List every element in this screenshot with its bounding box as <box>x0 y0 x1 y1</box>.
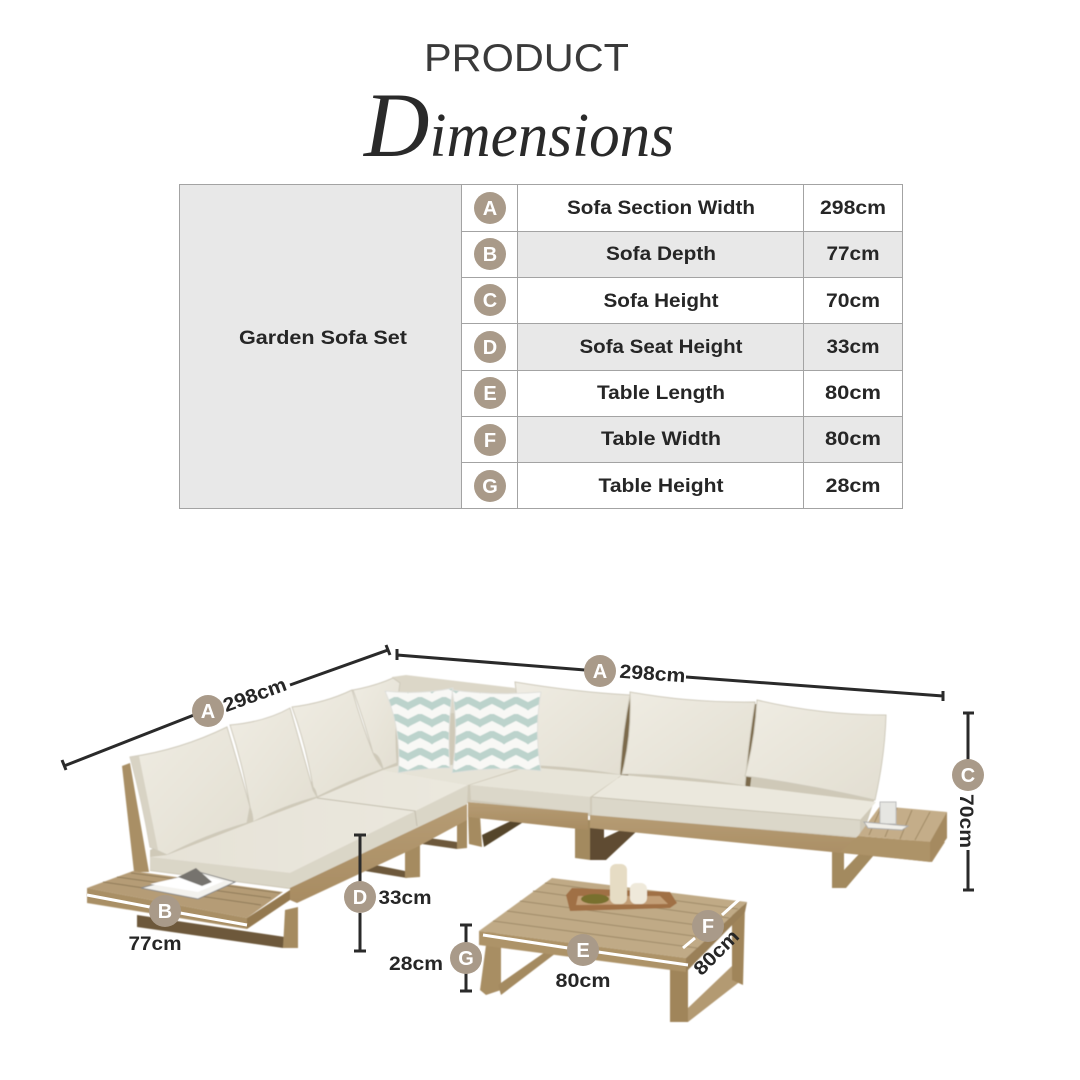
row G: 28cm <box>826 476 880 497</box>
sofa rails <box>290 802 945 903</box>
dimension B <box>87 895 247 955</box>
dimension C <box>952 713 984 890</box>
back cushions right run <box>515 682 886 800</box>
books and glasses <box>141 868 235 899</box>
title: product dimensions <box>362 37 674 176</box>
row G: Table Height <box>598 476 724 497</box>
row B: Sofa Depth <box>606 244 716 265</box>
back cushions left run <box>130 678 400 855</box>
dimension G: 28cm <box>389 953 443 975</box>
row G <box>474 470 880 502</box>
dimension C: 70cm <box>955 794 977 848</box>
row F: Table Width <box>601 429 721 450</box>
dimension A right <box>397 649 943 701</box>
seat cushion corner <box>383 765 530 785</box>
row G: G <box>482 476 498 498</box>
row E: E <box>483 383 497 405</box>
row B: 77cm <box>826 244 880 265</box>
panel: product name cell <box>180 184 462 508</box>
row A: 298cm <box>820 198 886 219</box>
row E: 80cm <box>825 383 881 404</box>
dimension C: C <box>961 765 975 787</box>
dimension E: E <box>576 940 590 962</box>
dimension G <box>389 925 482 991</box>
row A: Sofa Section Width <box>567 198 755 219</box>
row C <box>474 284 880 316</box>
dimension E: 80cm <box>556 970 610 992</box>
row B: B <box>483 244 497 266</box>
dimension D: D <box>353 887 367 909</box>
dimension A left <box>62 645 390 770</box>
panel: product name cell: Garden Sofa Set <box>239 328 408 349</box>
coffee table <box>479 864 747 1022</box>
dimension B: B <box>158 901 172 923</box>
dimensions table <box>180 184 902 508</box>
sofa legs <box>137 807 874 948</box>
row E: Table Length <box>597 383 725 404</box>
dimension A left: A <box>201 701 215 723</box>
seat cushions left run <box>150 770 468 888</box>
dimension F: 80cm <box>690 926 744 980</box>
dimension G: G <box>458 948 474 970</box>
corner back cushion <box>392 675 520 714</box>
illustration: corner garden sofa <box>87 675 947 1022</box>
row C: C <box>483 290 497 312</box>
row F <box>474 424 881 456</box>
row F: F <box>484 430 496 452</box>
row A: A <box>483 198 497 220</box>
left back frame <box>122 763 149 872</box>
seat cushions right run <box>470 767 876 837</box>
dimension A right: A <box>593 661 607 683</box>
sofa body backing <box>150 700 876 889</box>
left side table <box>87 868 290 929</box>
dimension D <box>344 835 432 951</box>
dimension A right: 298cm <box>619 661 686 687</box>
tray and candles <box>566 864 677 911</box>
dimension F <box>683 897 744 980</box>
heading: Dimensions script: Dimensions <box>362 74 674 176</box>
dimension D: 33cm <box>378 887 432 909</box>
dimension E <box>483 934 688 992</box>
row C: 70cm <box>826 291 880 312</box>
row D <box>474 331 880 363</box>
row F: 80cm <box>825 429 881 450</box>
dimension B: 77cm <box>128 933 182 955</box>
row B <box>474 238 880 270</box>
row A <box>474 192 886 224</box>
row D: D <box>483 337 497 359</box>
heading: PRODUCT: PRODUCT <box>424 37 629 80</box>
row D: Sofa Seat Height <box>580 337 743 358</box>
row E <box>474 377 881 409</box>
right side table <box>840 802 947 862</box>
throw pillows <box>385 688 541 773</box>
row D: 33cm <box>826 337 880 358</box>
dimension A left: 298cm <box>220 674 290 717</box>
dimension F: F <box>702 916 714 938</box>
gaps between right cushions <box>618 698 760 788</box>
row C: Sofa Height <box>604 291 719 312</box>
